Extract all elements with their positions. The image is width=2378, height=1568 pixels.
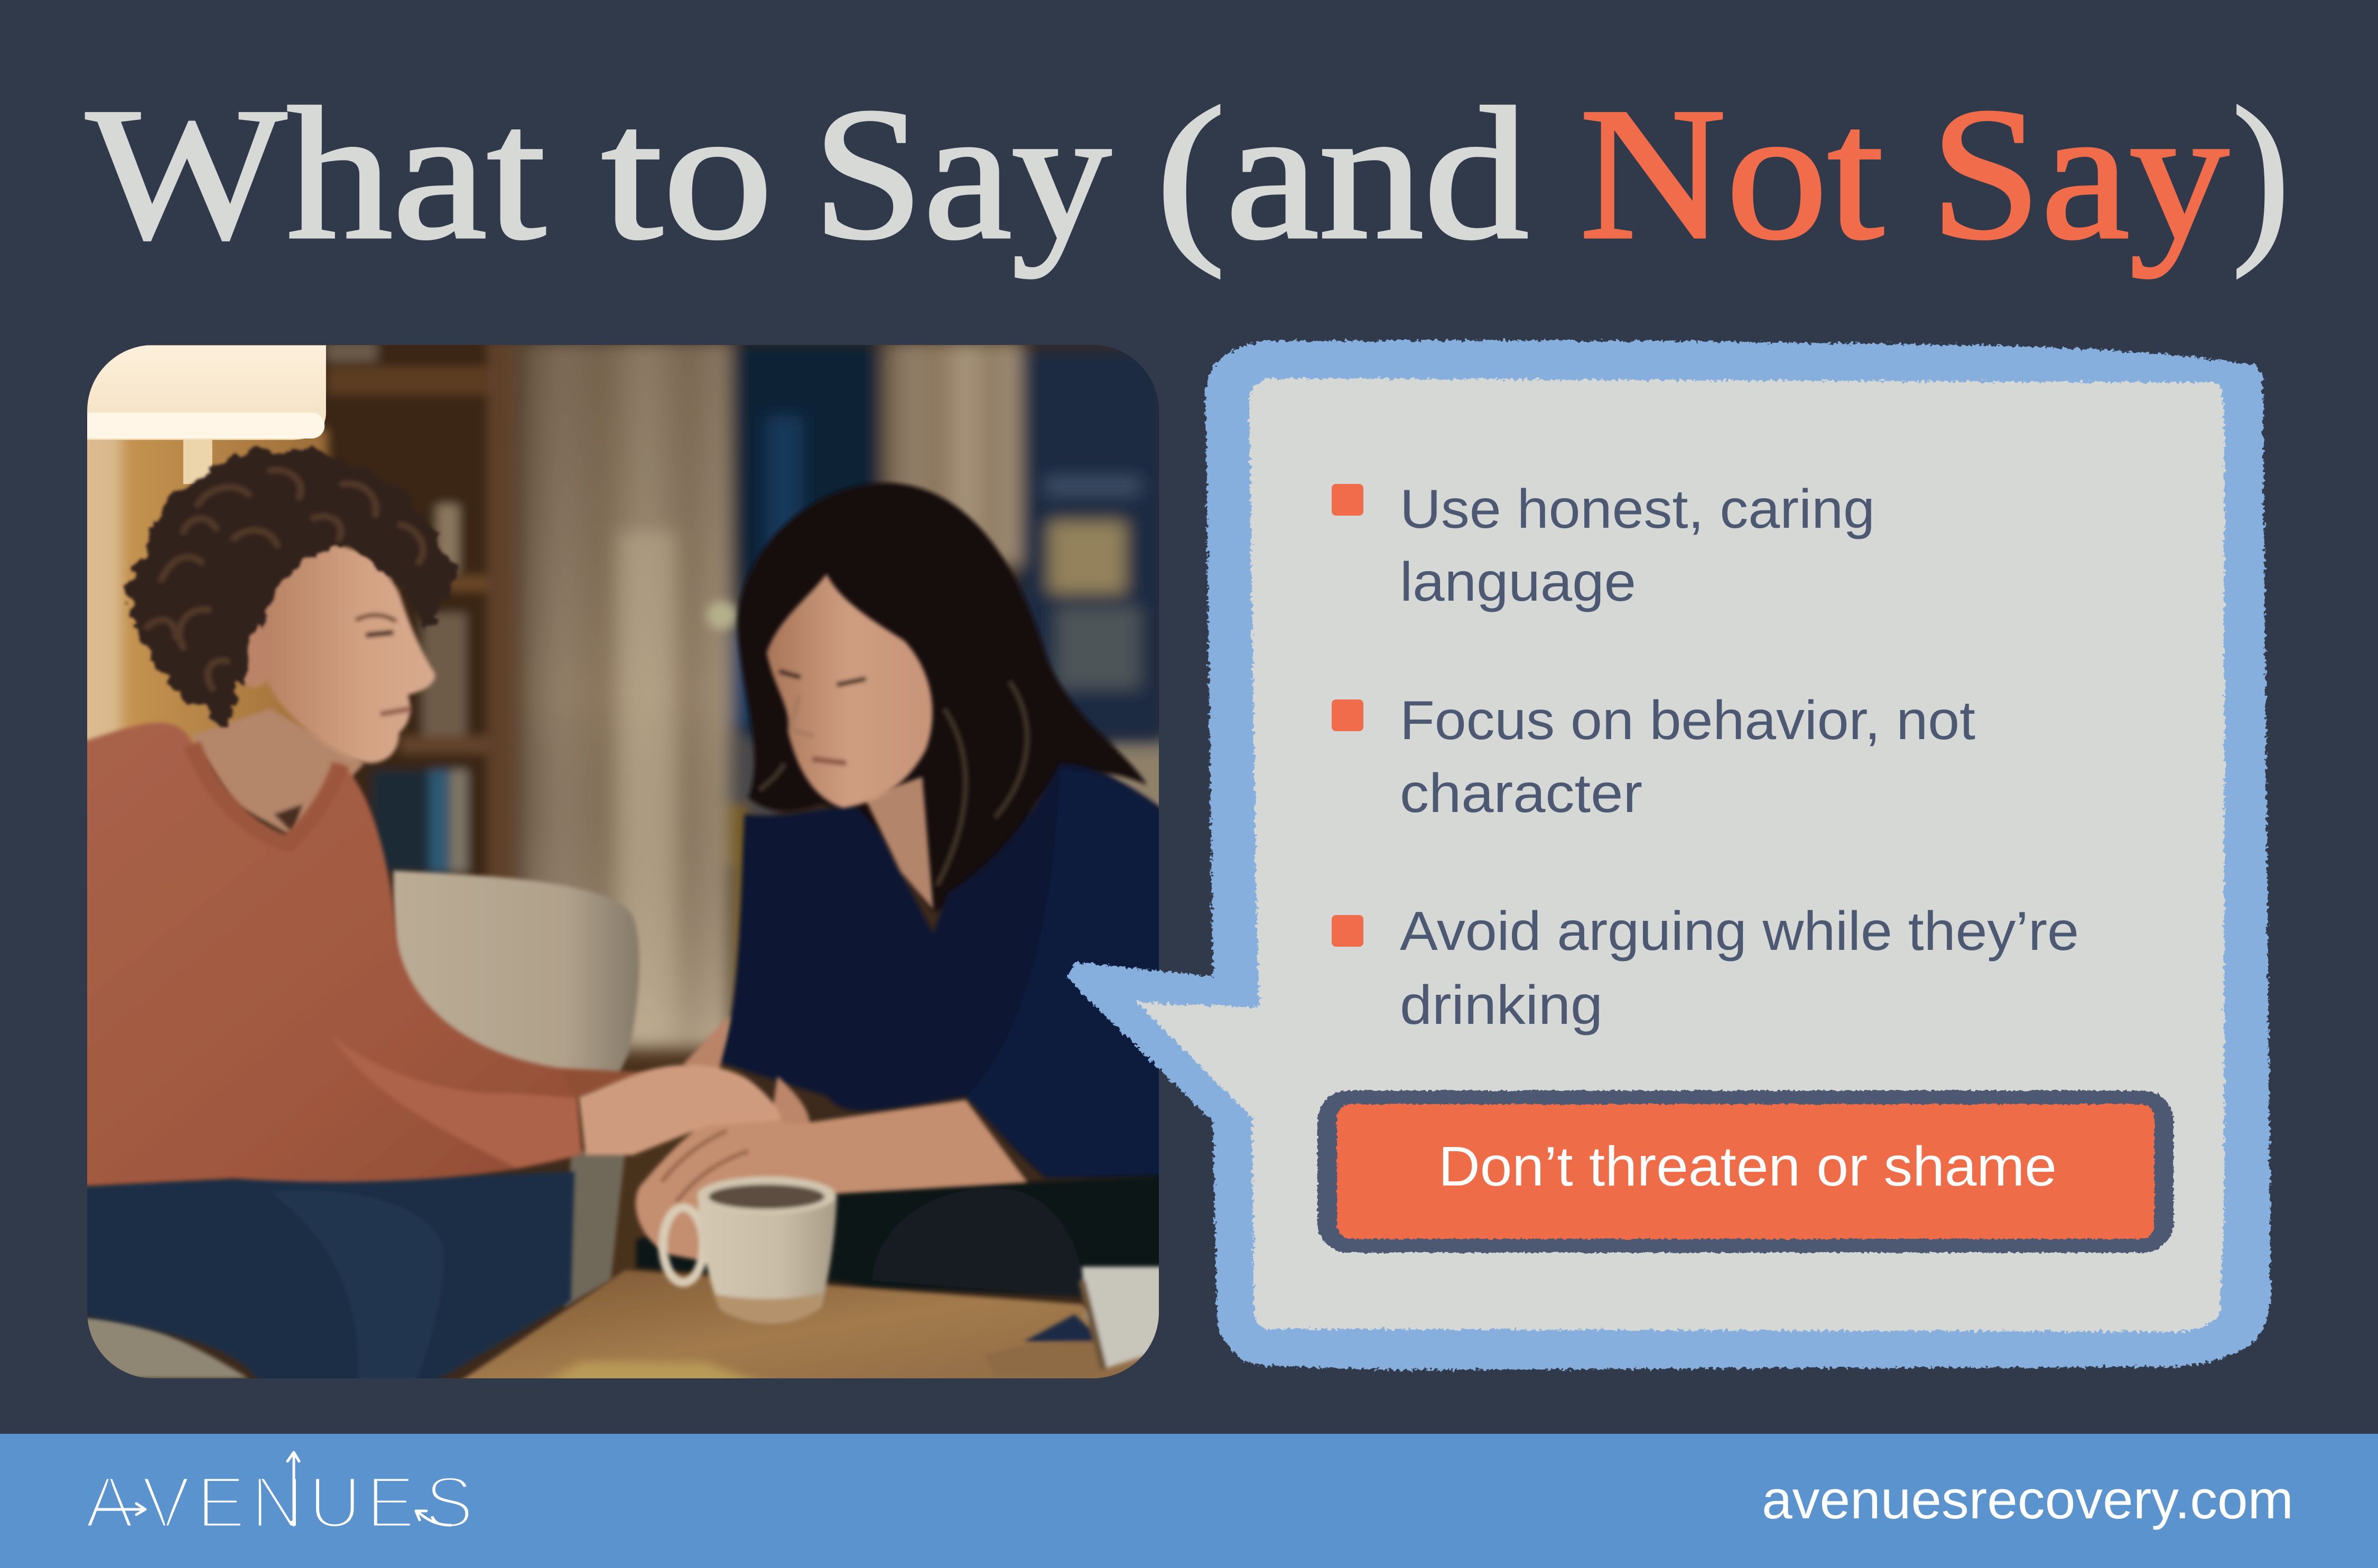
woman left: jeans bbox=[75, 1171, 574, 1389]
photo: two women talking on a sofa bbox=[53, 328, 1189, 1395]
logo: AVENUES bbox=[85, 1462, 473, 1543]
woman right: hair bbox=[738, 483, 1147, 911]
title: Not bbox=[1580, 69, 1884, 278]
bullet: honest language: language bbox=[1400, 552, 1636, 613]
lamp bbox=[75, 345, 326, 484]
bullet: avoid arguing bbox=[1332, 901, 2079, 1036]
bullet: behavior bbox=[1332, 690, 1975, 824]
website url: avenuesrecovery.com bbox=[1762, 1469, 2293, 1530]
woman right: hair strands bbox=[759, 682, 1027, 885]
logo arrows bbox=[96, 1452, 451, 1525]
title: to bbox=[601, 69, 773, 278]
woman left: sweater bbox=[75, 723, 651, 1187]
callout button bbox=[1317, 1090, 2173, 1253]
title: ) bbox=[2232, 69, 2290, 278]
room background bbox=[53, 328, 1189, 1395]
footer bar bbox=[0, 1434, 2378, 1568]
woman right: face bbox=[767, 574, 933, 808]
coffee mug bbox=[663, 1176, 837, 1323]
title bbox=[86, 69, 2290, 278]
coffee table bbox=[448, 1270, 1169, 1389]
sofa arm bbox=[82, 871, 639, 1378]
bullet: honest language bbox=[1332, 479, 1875, 613]
title: Say bbox=[813, 69, 1111, 278]
bullet: behavior: Focus on behavior, not bbox=[1400, 690, 1975, 751]
woman left: neck bbox=[191, 708, 365, 838]
curtains and windows bbox=[517, 341, 1169, 1049]
woman right: trousers bbox=[636, 1175, 1169, 1301]
bullet: behavior: character bbox=[1400, 763, 1642, 824]
bullet: avoid arguing: drinking bbox=[1400, 975, 1603, 1036]
bubble fill bbox=[1136, 378, 2224, 1332]
title: Say bbox=[1930, 69, 2229, 278]
bubble outline bbox=[1066, 340, 2271, 1370]
speech bubble bbox=[1066, 340, 2271, 1370]
title: (and bbox=[1156, 69, 1529, 278]
table note bbox=[531, 1362, 777, 1389]
woman left: face bbox=[236, 544, 435, 763]
bullet: honest language: Use honest, caring bbox=[1400, 479, 1875, 540]
bullet: avoid arguing: Avoid arguing while they’re bbox=[1400, 901, 2079, 962]
callout button: Don’t threaten or shame bbox=[1438, 1135, 2057, 1198]
woman left: hair bbox=[131, 449, 453, 726]
hands and forearms bbox=[579, 1015, 1027, 1262]
woman right: neck bbox=[865, 777, 933, 909]
window light bbox=[707, 601, 737, 630]
title: What bbox=[86, 69, 546, 278]
table books bbox=[984, 1267, 1169, 1376]
woman right: shirt bbox=[719, 763, 1169, 1178]
